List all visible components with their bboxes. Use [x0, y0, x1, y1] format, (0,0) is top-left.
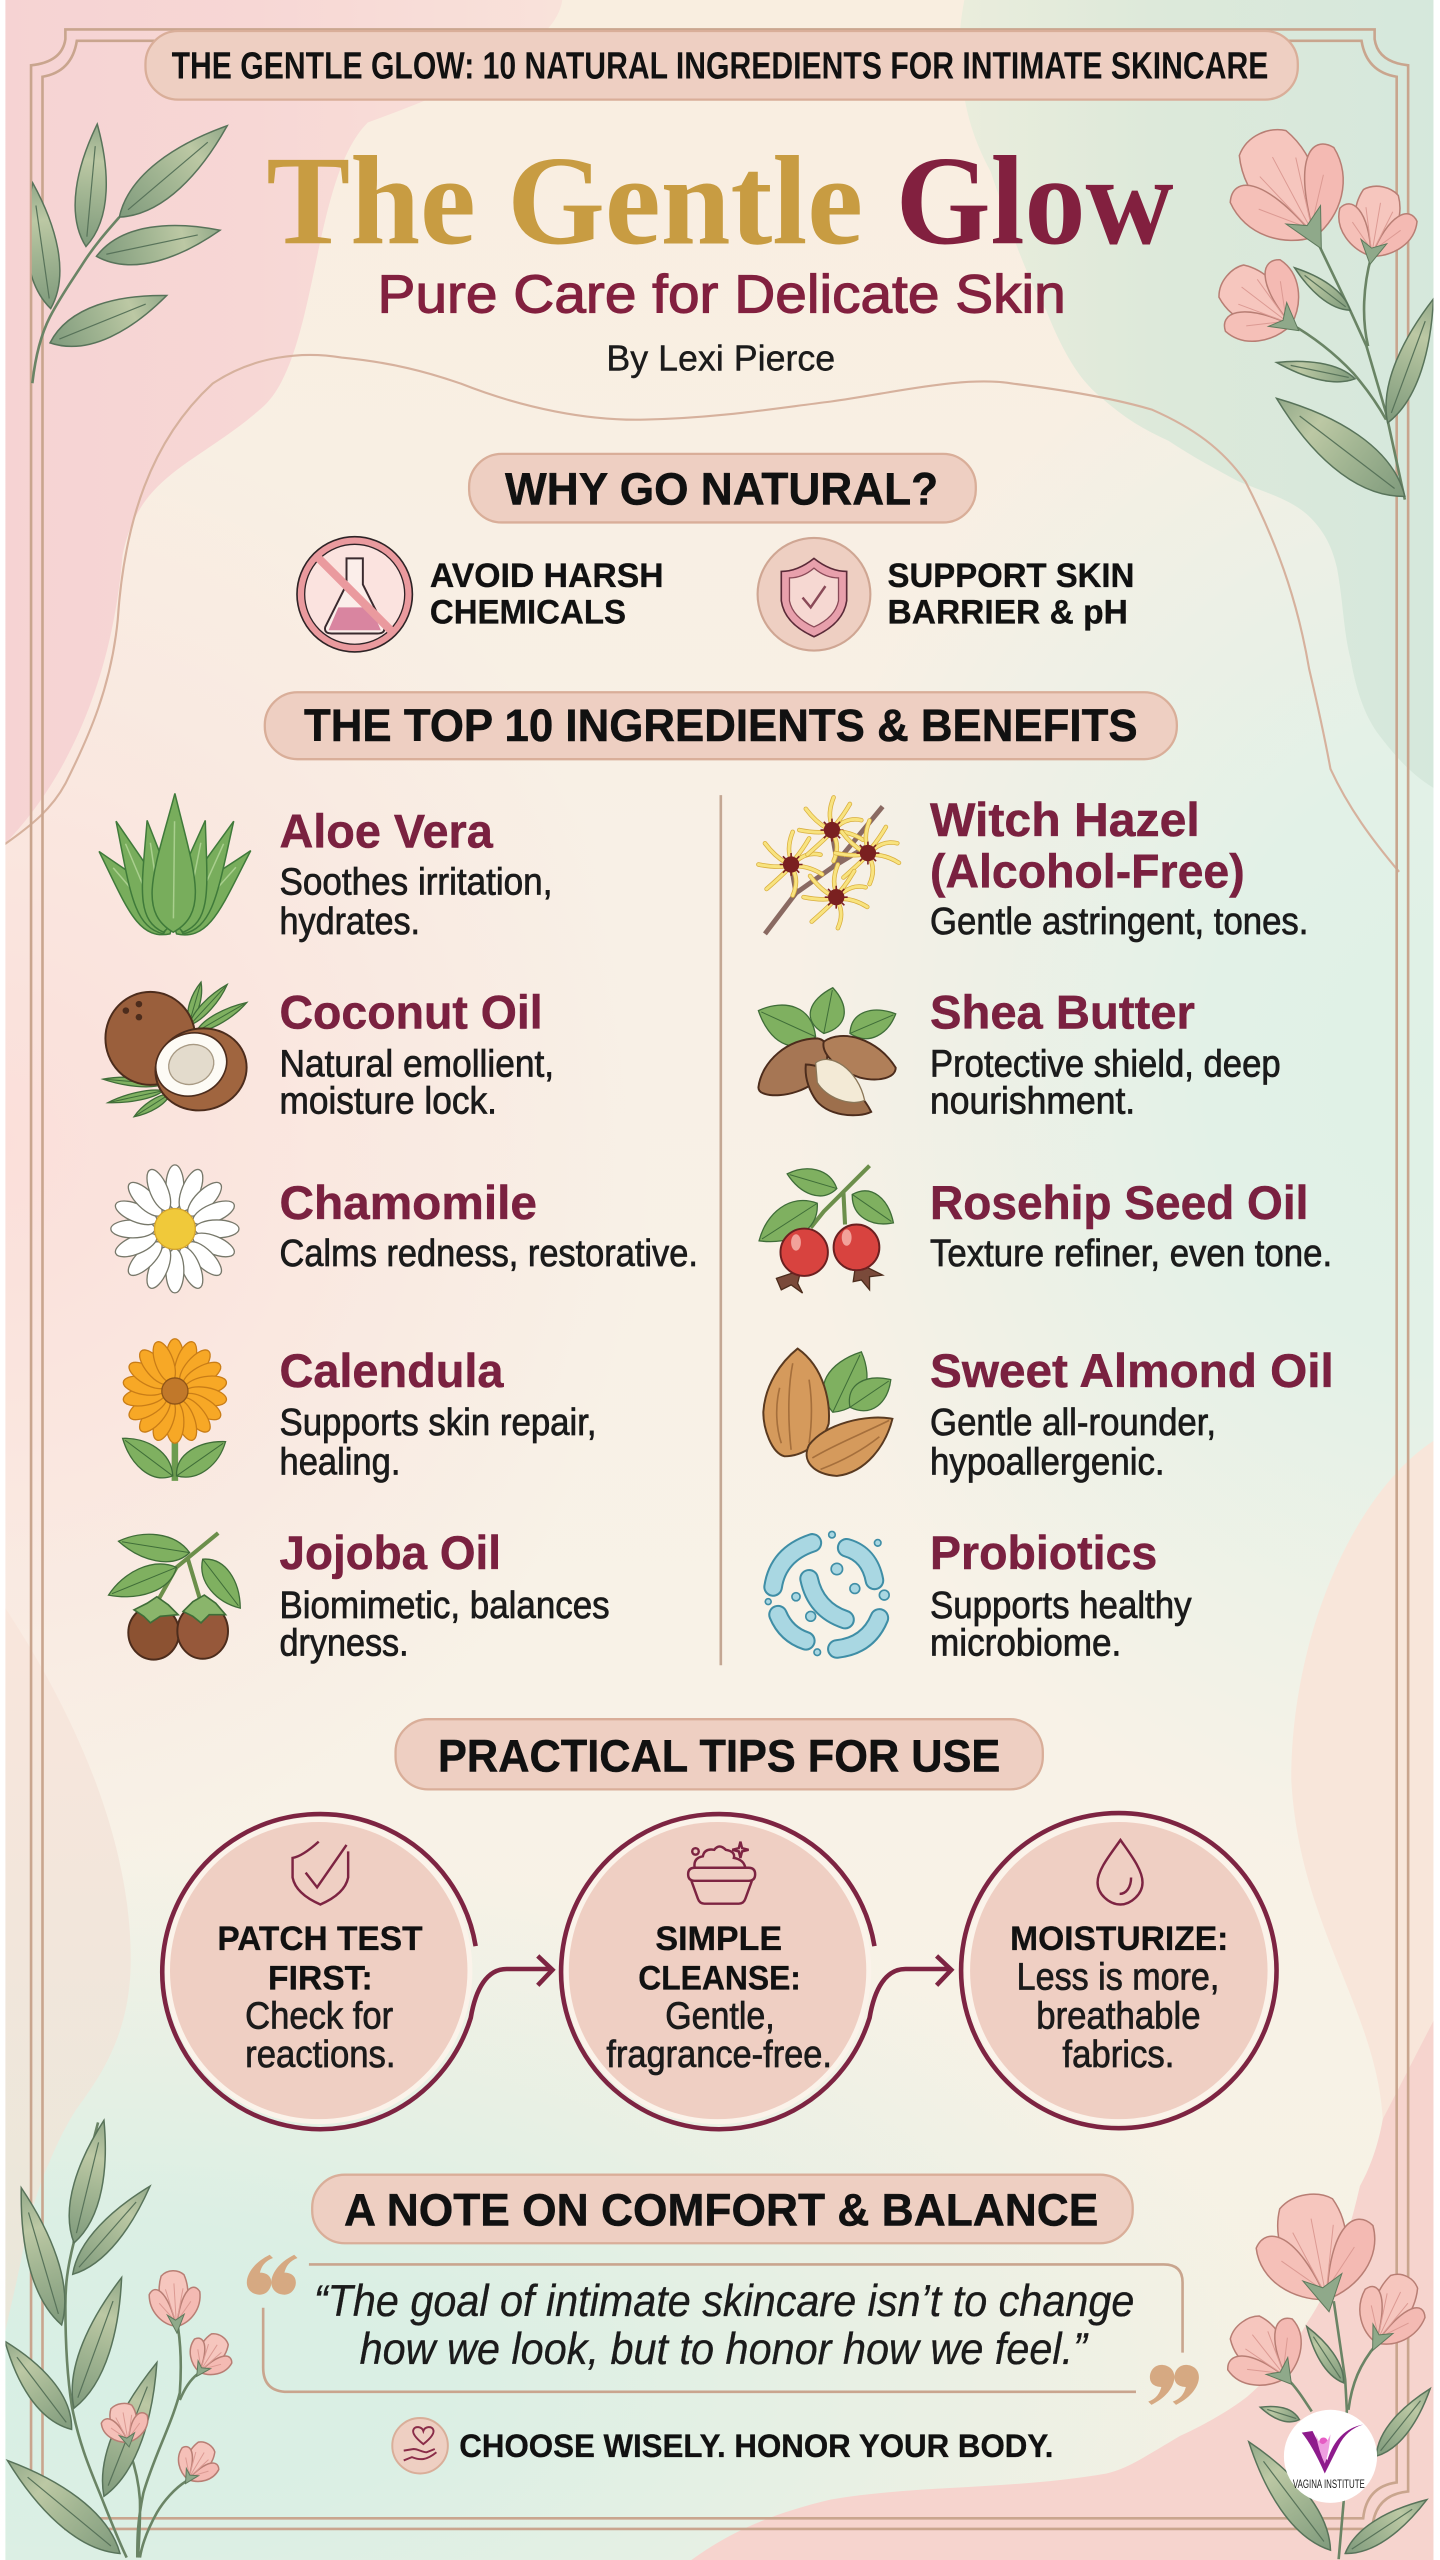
icon: shield check: [293, 1842, 348, 1904]
icon: coconut: [103, 981, 254, 1121]
heading: practical tips: [396, 1719, 1043, 1789]
description: Biomimetic, balances: [280, 1584, 610, 1626]
text: avoid harsh chemicals: AVOID HARSH: [430, 557, 664, 595]
main title: [266, 129, 1174, 271]
logo: vagina institute: VAGINA INSTITUTE: [1293, 2477, 1365, 2491]
byline: By Lexi Pierce: [606, 338, 835, 379]
heading: top 10 ingredients: THE TOP 10 INGREDIENTS & BENEFITS: [304, 700, 1138, 751]
description: nourishment.: [930, 1079, 1135, 1121]
ingredient: coconut oil: [103, 981, 554, 1121]
icon: rosehip: [750, 1162, 901, 1293]
text: fragrance-free.: [606, 2033, 832, 2075]
text: FIRST:: [268, 1959, 373, 1997]
text: support skin barrier: BARRIER & pH: [888, 594, 1128, 632]
logo: vagina institute: [1284, 2410, 1377, 2503]
text: Less is more,: [1017, 1955, 1219, 1997]
text: fabrics.: [1062, 2033, 1174, 2075]
description: Natural emollient,: [280, 1043, 554, 1085]
name: Calendula: [280, 1345, 504, 1398]
description: Protective shield, deep: [930, 1043, 1281, 1085]
ingredient: jojoba oil: [104, 1527, 610, 1664]
text: PATCH TEST: [217, 1920, 423, 1958]
decoration: top-left leaf branch: [31, 122, 229, 384]
text: CLEANSE:: [638, 1959, 801, 1997]
ingredient: calendula: [114, 1339, 597, 1487]
heading: practical tips: PRACTICAL TIPS FOR USE: [438, 1730, 1000, 1781]
text: support skin barrier: SUPPORT SKIN: [888, 557, 1134, 595]
icon: bacteria: [765, 1531, 889, 1656]
name: Coconut Oil: [280, 987, 543, 1040]
panel: why natural: [297, 537, 1134, 652]
quote box: [247, 2255, 1199, 2405]
text: avoid harsh chemicals: CHEMICALS: [430, 594, 626, 632]
description: Soothes irritation,: [280, 861, 552, 903]
tip: patch test: [162, 1814, 552, 2129]
text: CHOOSE WISELY. HONOR YOUR BODY.: [459, 2427, 1053, 2464]
title banner: [145, 31, 1298, 100]
name: (Alcohol-Free): [930, 845, 1245, 898]
tip: moisturize: [961, 1813, 1277, 2128]
text: [217, 1920, 423, 2075]
description: hydrates.: [280, 900, 420, 942]
description: hypoallergenic.: [930, 1440, 1165, 1482]
ingredient: chamomile: [111, 1165, 698, 1293]
description: Calms redness, restorative.: [280, 1232, 698, 1274]
quote text: “The goal of intimate skincare isn’t to change: [314, 2277, 1134, 2326]
text: MOISTURIZE:: [1010, 1920, 1228, 1958]
icon: jojoba: [104, 1529, 251, 1660]
description: moisture lock.: [280, 1079, 497, 1121]
ring: [961, 1813, 1277, 2128]
main title: Glow: [896, 129, 1174, 271]
ingredient: aloe vera: [86, 793, 552, 945]
description: healing.: [280, 1440, 400, 1482]
ring and arrow: [561, 1814, 951, 2129]
decoration: bottom-right flowers: [1210, 2183, 1438, 2560]
name: Rosehip Seed Oil: [930, 1177, 1308, 1230]
name: Aloe Vera: [280, 805, 493, 858]
icon: chamomile flower: [111, 1165, 239, 1293]
text: Check for: [245, 1995, 393, 2037]
decoration: bottom-left flowers: [0, 2117, 241, 2560]
ingredient: witch hazel: [758, 794, 1308, 942]
text: SIMPLE: [655, 1920, 782, 1958]
ingredient: sweet almond oil: [763, 1343, 1334, 1482]
description: Supports healthy: [930, 1584, 1192, 1626]
icon: witch hazel: [758, 797, 899, 934]
icon: calendula flower: [114, 1339, 233, 1487]
icon: no harsh chemicals: [297, 537, 412, 652]
opening quote mark: [247, 2255, 297, 2295]
text: reactions.: [245, 2033, 396, 2075]
ingredient: shea butter: [750, 984, 1281, 1121]
text: Gentle,: [665, 1995, 775, 2037]
main title: The Gentle: [266, 129, 863, 271]
quote text: how we look, but to honor how we feel.”: [360, 2325, 1089, 2374]
closing line: [392, 2418, 1053, 2473]
icon: aloe: [86, 793, 264, 945]
description: Supports skin repair,: [280, 1401, 597, 1443]
icon: almonds: [763, 1343, 899, 1476]
text: [606, 1920, 832, 2075]
decoration: top-right flowers: [1200, 106, 1440, 513]
name: Probiotics: [930, 1527, 1157, 1580]
name: Jojoba Oil: [280, 1527, 501, 1580]
icon: droplet: [1098, 1840, 1143, 1904]
closing quote mark: [1148, 2365, 1199, 2405]
icon: shea nuts: [750, 984, 901, 1115]
heading: a note on comfort: A NOTE ON COMFORT & BALANCE: [344, 2184, 1098, 2235]
description: Gentle all-rounder,: [930, 1401, 1216, 1443]
column divider: [720, 795, 722, 1665]
description: dryness.: [280, 1622, 409, 1664]
icon: shield: [758, 538, 870, 651]
ingredient: probiotics: [765, 1527, 1192, 1664]
subtitle: Pure Care for Delicate Skin: [378, 265, 1066, 325]
tip: simple cleanse: [561, 1814, 951, 2129]
name: Sweet Almond Oil: [930, 1345, 1334, 1398]
icon: wash bowl: [688, 1842, 755, 1904]
description: microbiome.: [930, 1622, 1121, 1664]
ingredient: rosehip seed oil: [750, 1162, 1332, 1293]
text: [1010, 1920, 1228, 2075]
icon: heart in hand: [392, 2418, 448, 2473]
description: Texture refiner, even tone.: [930, 1232, 1332, 1274]
description: Gentle astringent, tones.: [930, 900, 1308, 942]
name: Witch Hazel: [930, 794, 1200, 847]
arch line: [5, 355, 1399, 872]
name: Shea Butter: [930, 987, 1195, 1040]
ring and arrow: [162, 1814, 552, 2129]
heading: why go natural: [469, 454, 976, 522]
name: Chamomile: [280, 1177, 537, 1230]
text: breathable: [1036, 1995, 1201, 2037]
heading: why go natural: WHY GO NATURAL?: [505, 464, 938, 514]
